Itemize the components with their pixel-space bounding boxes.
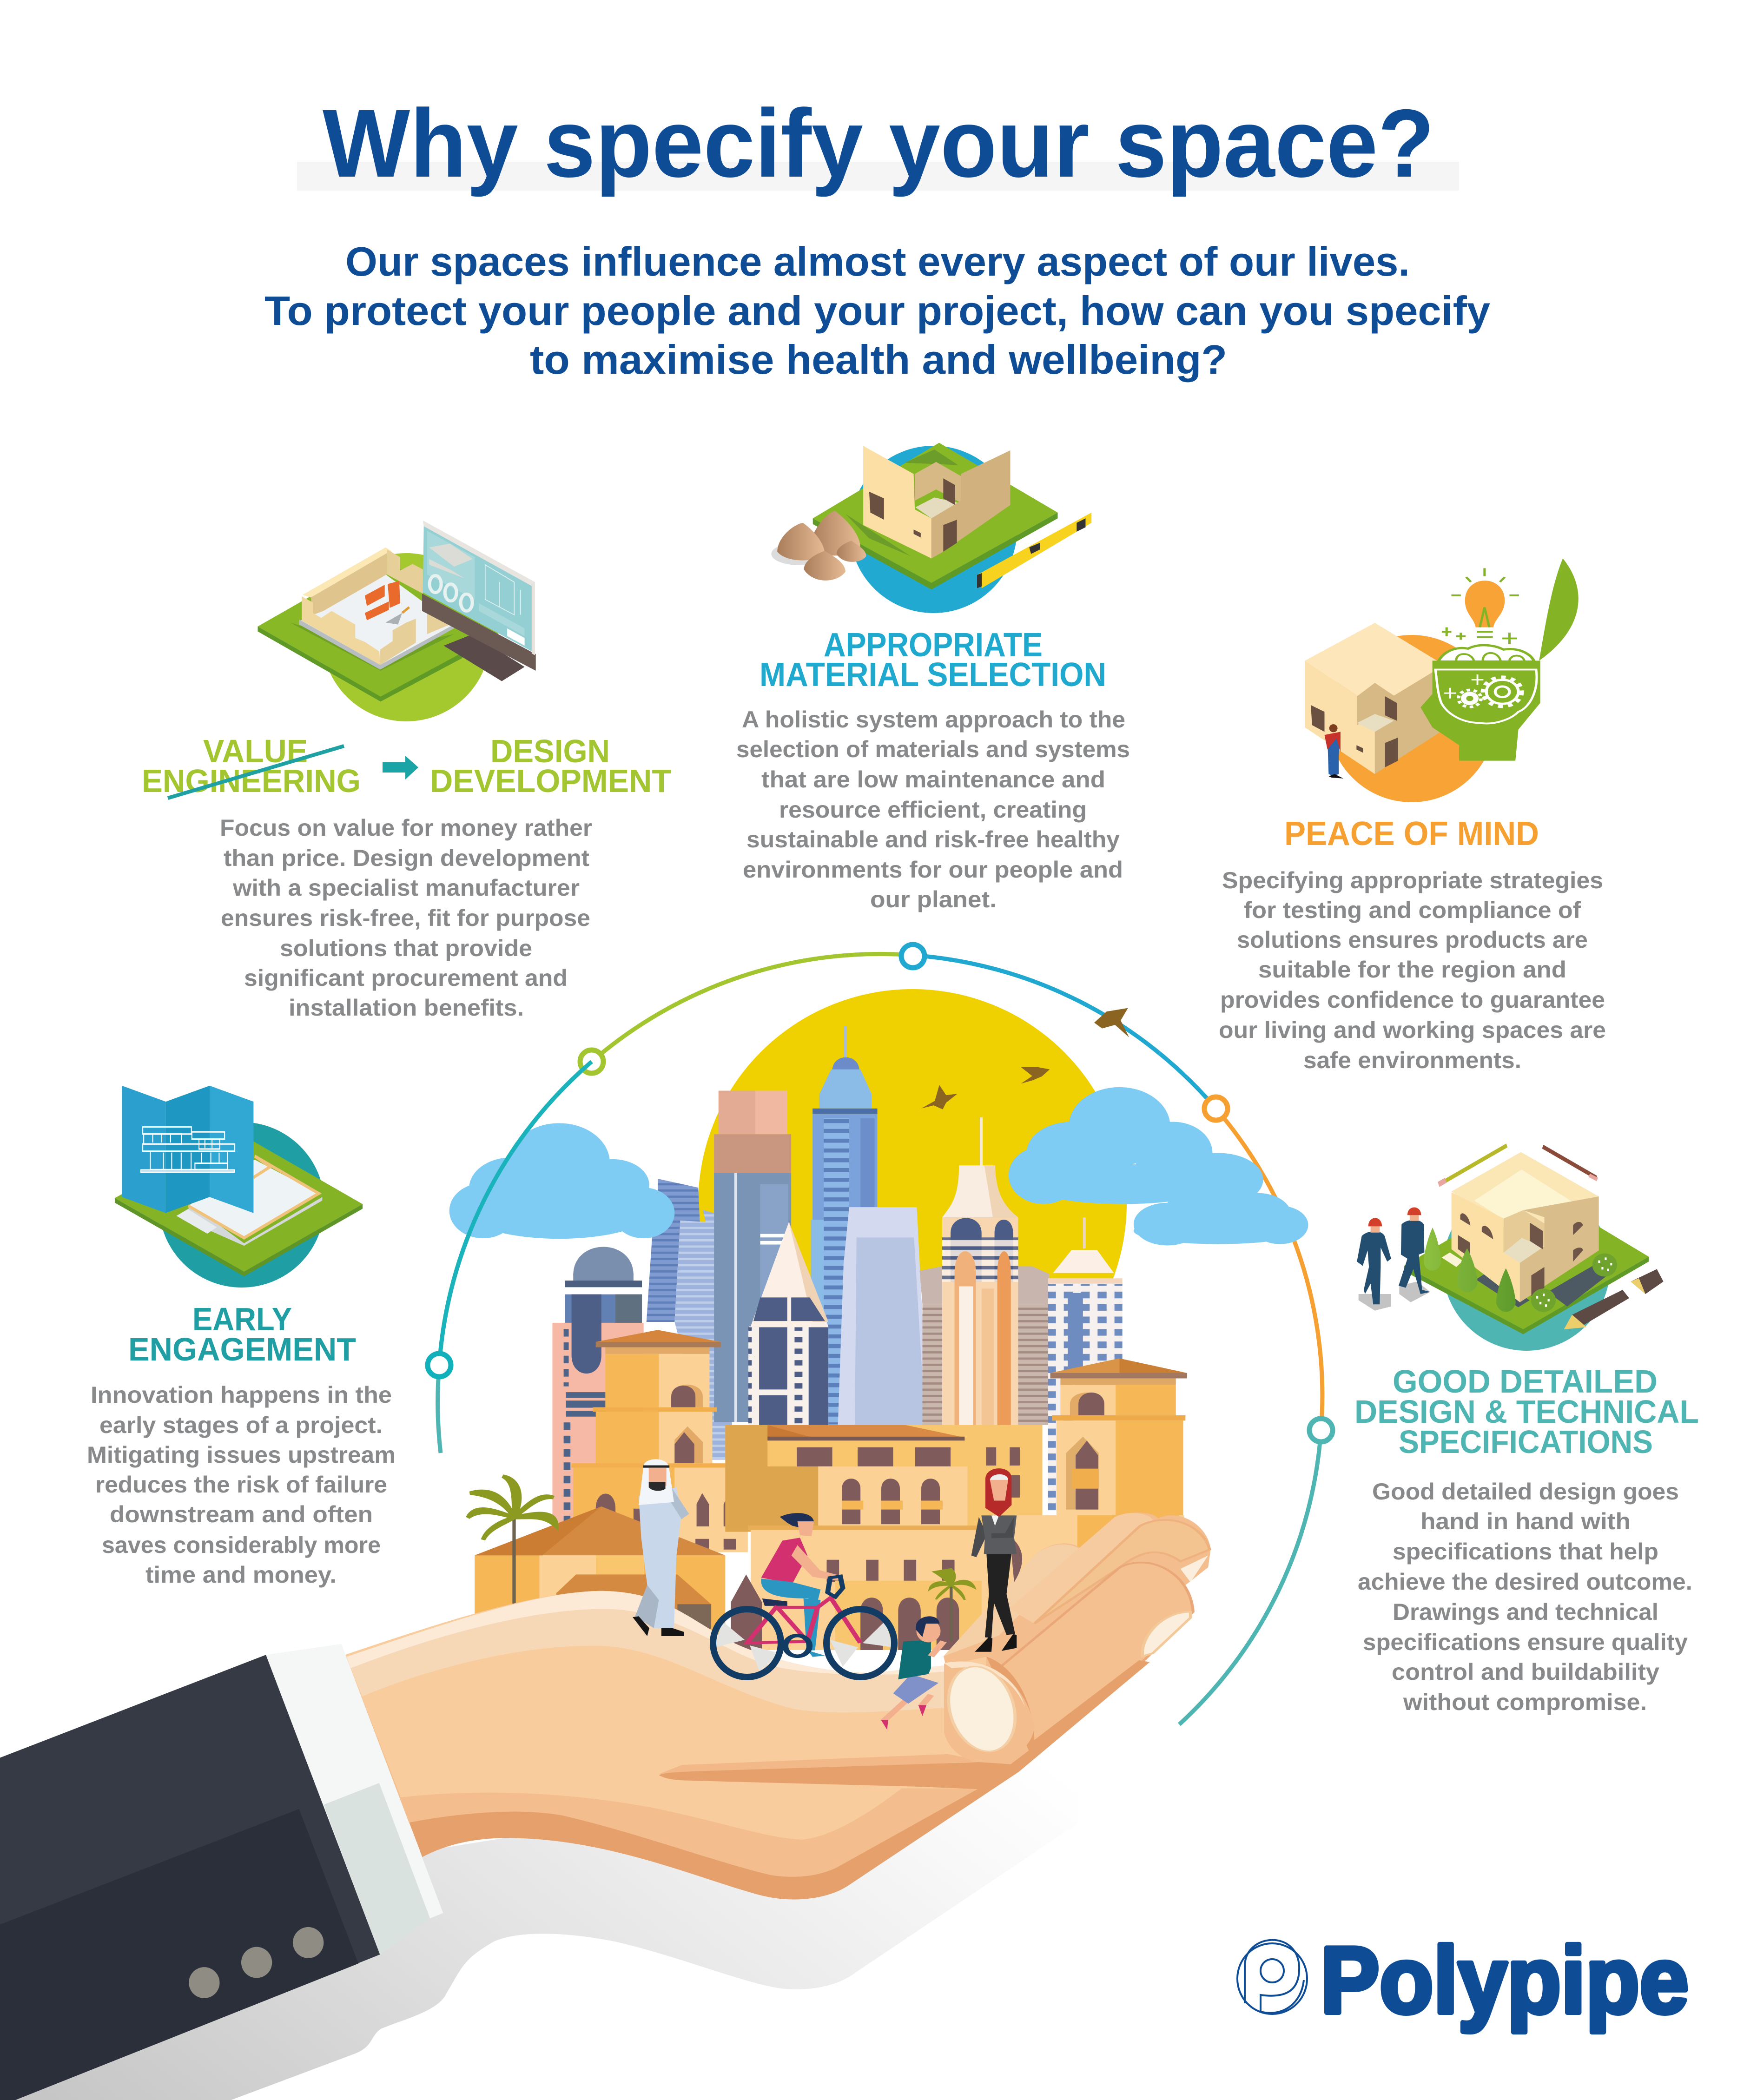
node: peace of mind [1204,1097,1228,1120]
body: good detailed design: Good detailed design goes [1372,1479,1679,1505]
heading: good detailed design [1354,1363,1699,1460]
brick walls [303,548,392,598]
body: material selection: environments for our people and [743,857,1123,883]
cloud right [1009,1087,1308,1245]
crease [659,1754,986,1775]
heading: early engagement [128,1301,356,1367]
heading: good detailed design: DESIGN & TECHNICAL [1354,1393,1699,1430]
glass tower back [647,1179,733,1460]
palm [345,1591,986,1840]
node: material selection [901,944,925,968]
body: early engagement: Mitigating issues upstream [87,1442,396,1468]
bushes [1531,1288,1556,1312]
sun [698,989,1127,1283]
pale glass tower [838,1207,928,1425]
arc: peace of mind [1216,1109,1322,1430]
monitor screen [423,525,532,652]
heading: early engagement: EARLY [192,1301,292,1337]
arc: early engagement [439,1062,592,1365]
man in thobe [633,1459,689,1636]
wheel front [826,1609,894,1677]
body: early engagement: early stages of a project. [99,1412,383,1438]
logo wordmark: Polypipe [1321,1928,1689,2033]
house [1452,1152,1599,1240]
platform [1404,1188,1649,1329]
heading: value engineering [142,733,361,799]
mid tone [345,1591,1029,1877]
icon: good detailed design [1357,1145,1664,1351]
folded plan map [122,1086,166,1213]
white right tower [1048,1217,1123,1511]
slab [300,575,454,665]
central sand building [725,1425,1043,1532]
body: good detailed design [1358,1479,1692,1715]
cuff [266,1644,443,1955]
subtitle: Our spaces influence almost every aspect of our lives. [345,238,1410,284]
workers [1359,1281,1430,1311]
body: good detailed design: specifications that help [1393,1539,1658,1565]
ornate tower [942,1117,1018,1425]
trowel [385,613,402,625]
small palm [930,1569,975,1641]
house walls [915,462,961,503]
bush blossoms [1536,1259,1612,1306]
body: material selection: resource efficient, creating [779,797,1087,823]
platform [258,557,508,697]
heading: peace of mind: PEACE OF MIND [1284,815,1539,852]
icon backdrop circle [159,1122,324,1288]
outline band [345,1591,1034,1899]
body: material selection: that are low maintenance and [761,766,1105,792]
body: early engagement: Innovation happens in the [91,1382,392,1408]
arc: good detailed design [1179,1430,1321,1724]
fingers [944,1512,1211,1766]
building line drawing [141,1127,235,1172]
body: peace of mind: safe environments. [1303,1047,1521,1073]
head silhouette [1420,660,1540,761]
hand shadow [15,1758,1079,2100]
worker figure [1328,736,1341,776]
hand outer edge strip [848,1660,1150,1886]
cuff shadow [324,1783,430,1955]
heading: material selection [760,627,1106,693]
body: good detailed design: hand in hand with [1420,1508,1631,1534]
platform [813,443,1058,583]
heading: good detailed design: SPECIFICATIONS [1399,1424,1653,1460]
arc: material selection [913,955,1216,1109]
heading: value engineering: ENGINEERING [142,763,361,799]
brain outline [1435,669,1537,723]
heading: design development [430,733,671,799]
body: good detailed design: control and buildability [1392,1659,1659,1685]
city illustration [449,1008,1308,1650]
body: early engagement: downstream and often [110,1501,373,1527]
logo: Polypipe [1237,1928,1689,2033]
heading: material selection: APPROPRIATE [824,627,1043,664]
body: material selection: sustainable and risk-free healthy [746,826,1120,852]
palm highlight [347,1591,952,1675]
ring timeline [438,944,1333,1724]
body: value engineering: solutions that provide [280,935,532,961]
body: peace of mind: suitable for the region and [1258,957,1566,983]
body: early engagement [87,1382,396,1588]
icon backdrop circle [1328,635,1495,802]
heading: design development: DESIGN [490,733,610,769]
left house [475,1506,725,1650]
body: early engagement: reduces the risk of failure [95,1472,387,1498]
body: value engineering: than price. Design development [224,845,589,871]
arc over left cloud [439,1062,592,1365]
dome building [552,1247,644,1523]
fingernail lower [1143,1612,1190,1656]
hand [345,1591,1034,1899]
body: value engineering: significant procurement and [244,965,568,991]
icon: value engineering [258,521,536,721]
foundation slab [177,1197,322,1246]
subtitle [264,238,1490,383]
body: good detailed design: Drawings and technical [1393,1599,1658,1625]
body: value engineering: installation benefits. [289,995,524,1021]
paving [1548,1261,1613,1307]
arrow [383,756,418,779]
body: value engineering: with a specialist manufacturer [232,875,580,901]
arc: early engagement tail [438,1365,441,1453]
birds [921,1008,1129,1109]
platform [115,1131,363,1272]
light bulb [1465,581,1505,627]
cyclist [747,1513,860,1657]
body: material selection: our planet. [870,886,997,912]
body: good detailed design: without compromise. [1403,1689,1647,1715]
body: value engineering: ensures risk-free, fit for purpose [221,905,590,931]
body: peace of mind: our living and working spaces are [1219,1017,1606,1043]
body: material selection: selection of materials and systems [736,736,1130,762]
monitor stand [444,634,525,681]
leaf [1539,558,1579,660]
arc: value engineering [592,954,913,1062]
child [881,1616,944,1730]
pink top tower [714,1091,791,1422]
pencils [1440,1145,1507,1184]
body: peace of mind: provides confidence to guarantee [1220,987,1605,1013]
body: early engagement: saves considerably more [102,1532,381,1558]
node: value engineering [580,1050,603,1073]
taupe back building [919,1266,1049,1425]
icon: material selection [771,443,1091,613]
body: early engagement: time and money. [145,1562,337,1588]
heading: material selection: MATERIAL SELECTION [760,656,1106,693]
sleeve upper [0,1655,380,2100]
suit sleeve and cuff [0,1644,443,2100]
icon backdrop circle [850,446,1017,613]
node: early engagement [428,1354,451,1377]
blue spire tower [811,1026,878,1425]
strike-through line [168,746,344,798]
body: good detailed design: achieve the desired outcome. [1358,1569,1692,1595]
monitor bezel [422,594,536,671]
heading: value engineering: VALUE [203,733,308,769]
node: good detailed design [1309,1419,1333,1442]
house [1305,623,1444,707]
palm tree [468,1476,556,1606]
sleeve lower [0,1809,358,2100]
fingernail upper [1181,1555,1208,1582]
body: value engineering: Focus on value for money rather [220,815,592,841]
body: peace of mind: solutions ensures products are [1237,927,1588,953]
woman [971,1468,1022,1652]
left sand tower [572,1330,751,1552]
cuff buttons [189,1927,324,1998]
body: good detailed design: specifications ensure quality [1363,1629,1688,1655]
subtitle: to maximise health and wellbeing? [530,337,1227,383]
thumb [944,1662,1034,1763]
icon: early engagement [115,1086,363,1288]
trees [1424,1228,1516,1312]
heading: design development: DEVELOPMENT [430,763,671,799]
body: material selection [736,707,1130,912]
body: peace of mind: Specifying appropriate strategies [1222,867,1603,893]
spike tower [748,1222,828,1425]
wheel rear [713,1609,781,1677]
icon backdrop circle [1443,1183,1610,1351]
markers [1572,1290,1629,1325]
icon: peace of mind [1305,558,1579,802]
heading: early engagement: ENGAGEMENT [128,1331,356,1367]
doors [869,478,957,552]
logo mark [1237,1940,1307,2014]
body: peace of mind [1219,867,1606,1073]
people [633,1459,1022,1730]
body: material selection: A holistic system approach to the [742,707,1125,733]
cloud left [449,1123,674,1239]
heading: good detailed design: GOOD DETAILED [1393,1363,1658,1400]
bricks [365,581,400,620]
gears [1461,692,1479,705]
house doors and windows [1458,1213,1583,1296]
lower sand buildings [731,1515,1184,1650]
subtitle: To protect your people and your project, how can you specify [264,288,1490,334]
wheel spokes [715,1621,893,1671]
rock piles [771,543,825,565]
body: peace of mind: for testing and compliance of [1244,897,1581,923]
icon backdrop circle [322,553,490,721]
thumb nail [942,1665,1022,1753]
spirit level [977,513,1091,588]
pencil ends [1438,1174,1598,1187]
palm light band [347,1591,956,1712]
bicycle wheels [713,1609,894,1677]
title: Why specify your space? [323,90,1434,198]
body: value engineering [220,815,592,1021]
right sand tower [1050,1358,1187,1518]
